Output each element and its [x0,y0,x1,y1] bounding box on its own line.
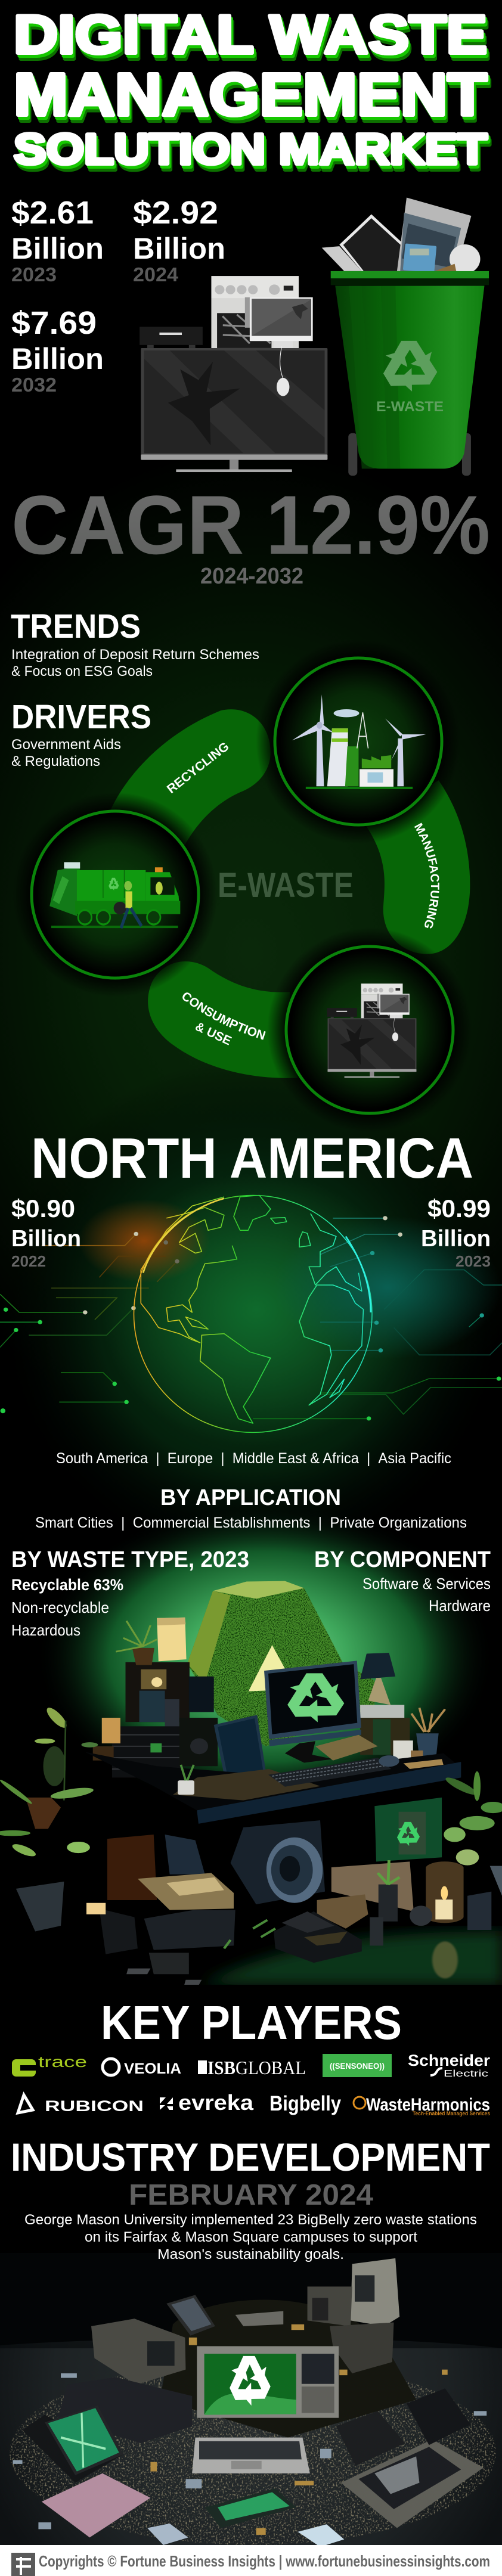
label: recycling: RECYCLING [165,740,232,796]
stat: North America 2023: 2023 [455,1252,491,1270]
by waste type [11,1547,249,1639]
by component [314,1547,491,1615]
stat: 2024 market size: 2024 [133,263,179,285]
monitor [264,1661,378,1763]
circle: factory and wind turbines [256,639,461,844]
logo: trace [12,2053,87,2077]
stat: North America 2022: $0.90 [11,1194,75,1222]
cycle blobs [110,709,470,1078]
stat: 2032 market size: 2032 [11,374,57,396]
logo: Bigbelly: Bigbelly [269,2092,341,2115]
desk [85,1752,461,1824]
potted plants [0,1705,502,1932]
globe with circuit lines [0,1172,502,1447]
stat: North America 2022: Billion [11,1226,81,1252]
label: consumption and use: CONSUMPTION [182,992,266,1040]
CAGR period: 2024-2032 [200,564,303,589]
logo: Schneider Electric: Electric [444,2069,488,2079]
logo: Rubicon: RUBICON [45,2098,144,2115]
stat: 2023 market size: Billion [11,232,104,265]
key player logos [12,2052,491,2116]
by waste type: Hazardous [11,1621,80,1639]
illustration: discarded appliances and TV [140,276,327,472]
boxes, books and candles [107,1835,491,1978]
stat: North America 2022 [11,1194,81,1270]
stat: 2032 market size: $7.69 [11,305,97,341]
logo: Schneider Electric: Schneider [408,2052,491,2069]
key players heading: KEY PLAYERS [101,1996,402,2049]
trends: Integration of Deposit Return Schemes [11,647,259,663]
stat: 2023 market size: $2.61 [11,195,94,231]
development description: Mason's sustainability goals. [157,2246,344,2262]
logo: Veolia [103,2059,181,2077]
by waste type: Recyclable 63% [11,1576,123,1594]
logo: Evreka: evreka [178,2090,254,2115]
bottom devices [86,1903,383,1985]
stat: 2024 market size: Billion [133,232,225,265]
drivers: DRIVERS [11,698,151,736]
by component: Hardware [429,1597,491,1615]
lamp [360,1653,404,1722]
stat: North America 2023: $0.99 [427,1194,491,1222]
circuit lines [0,1218,502,1419]
trends: & Focus on ESG Goals [11,663,153,679]
debris specks [10,2360,496,2545]
moss recycling block [187,1581,374,1746]
drivers [11,698,151,769]
trends [11,607,259,679]
illustration: e-waste bin: E-WASTE [376,399,444,415]
logo: Sensoneo [323,2054,392,2077]
stat: 2032 market size [11,305,104,396]
title [14,5,487,173]
stat: 2032 market size: Billion [11,342,104,375]
development date: FEBRUARY 2024 [129,2179,373,2211]
development description [24,2212,477,2262]
label: consumption and use: & USE [193,1020,234,1048]
logo: Sensoneo: ((SENSONEO)) [330,2061,385,2071]
logo: WasteHarmonics: Tech-Enabled Managed Services [413,2111,490,2116]
e-waste pile image [0,2253,502,2547]
development description: on its Fairfax & Mason Square campuses to support [85,2229,417,2245]
logo: Rubicon [18,2095,144,2115]
trends: TRENDS [11,607,141,645]
title: DIGITAL WASTE [14,5,487,65]
key players heading [0,1985,502,2253]
circle: appliances [267,927,472,1132]
region heading: NORTH AMERICA [31,1126,473,1190]
stat: 2023 market size: 2023 [11,263,57,285]
globe outline [134,1196,372,1432]
desk scene image [0,1502,502,1985]
circle: recycling truck [13,792,218,997]
by component: BY COMPONENT [314,1547,491,1572]
by component: Software & Services [362,1575,491,1593]
title: MANAGEMENT [14,61,487,128]
illustration: e-waste bin [322,198,489,476]
stat: North America 2023: Billion [421,1226,491,1252]
footer logo [11,2553,35,2576]
stat: 2023 market size [11,195,104,285]
left stacked electronics [93,1618,218,1777]
by waste type: BY WASTE TYPE, 2023 [11,1547,249,1572]
center label: E-WASTE [218,866,354,905]
by application: BY APPLICATION [160,1485,341,1510]
other regions: South America | Europe | Middle East & Africa | Asia Pacific [56,1450,451,1467]
logo: Schneider Electric [408,2052,491,2079]
small laptop [214,1715,267,1783]
by waste type: Non-recyclable [11,1599,109,1616]
speaker [231,1820,325,1904]
drivers: Government Aids [11,737,121,753]
e-waste cycle diagram [21,648,470,1125]
stat: North America 2023 [421,1194,491,1270]
logo: Veolia: VEOLIA [124,2060,181,2077]
stat: North America 2022: 2022 [11,1252,46,1270]
development description: George Mason University implemented 23 BigBelly zero waste stations [24,2212,477,2228]
stat: 2024 market size: $2.92 [133,195,218,231]
drivers: & Regulations [11,753,100,769]
logo: ISB Global: ISBGLOBAL [207,2057,306,2078]
stat: 2024 market size [133,195,225,285]
right shelf items [360,1708,445,1764]
logo: trace: trace [38,2053,87,2071]
by application: Smart Cities | Commercial Establishments | Private Organizations [35,1514,467,1531]
footer [0,2545,502,2576]
label: manufacturing: MANUFACTURING [414,823,439,929]
by application [35,1485,467,1531]
green recycling box [374,1798,442,1861]
CAGR headline: CAGR 12.9% [11,478,490,572]
title: SOLUTION MARKET [14,126,487,173]
